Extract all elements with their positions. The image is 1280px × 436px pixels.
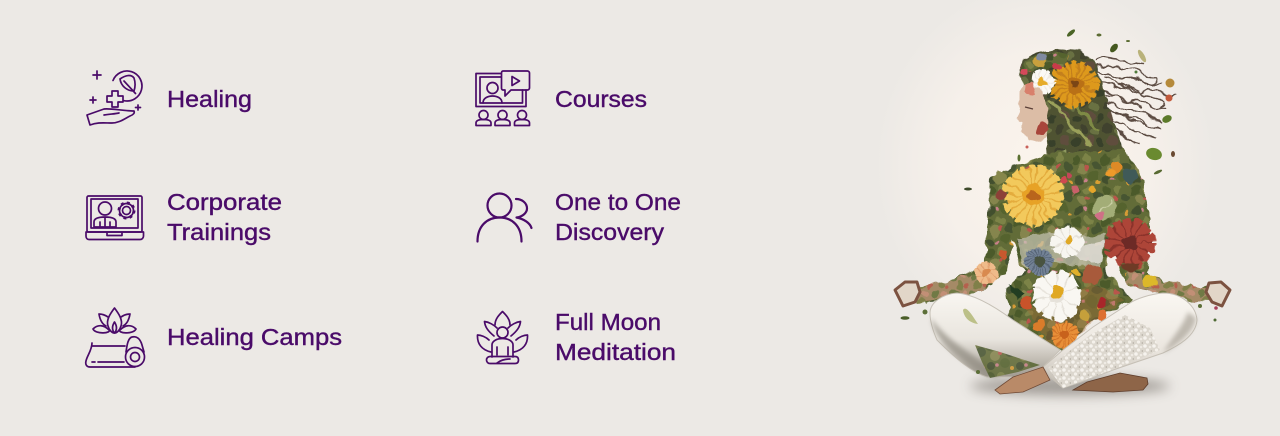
flower: upper daisy — [1053, 228, 1081, 256]
lace texture — [1048, 315, 1160, 388]
face — [1017, 84, 1048, 142]
flying leaves and petals — [900, 28, 1218, 374]
flower: red dahlia — [1108, 221, 1152, 273]
flower: white daisy centre — [1035, 274, 1079, 318]
flower: large sunflower — [1006, 167, 1062, 223]
label: Corporate Trainings: Trainings — [167, 219, 271, 245]
icon: meditating figure in lotus — [477, 312, 528, 364]
eye line — [1025, 107, 1033, 109]
icon: video course with audience — [476, 71, 530, 126]
label: Full Moon Meditation: Meditation — [555, 339, 676, 365]
label: Corporate Trainings: Corporate — [167, 189, 282, 215]
label: Full Moon Meditation: Full Moon — [555, 309, 661, 335]
label: Healing: Healing — [167, 86, 252, 112]
label: Healing Camps: Healing Camps — [167, 324, 342, 350]
torso and arms — [918, 150, 1215, 352]
foliage on left leg — [975, 345, 1040, 378]
soft glow behind figure — [875, 0, 1215, 350]
flower: hair daisy — [1032, 72, 1052, 92]
service: Corporate Trainings — [86, 189, 282, 245]
ground shadow — [970, 377, 1170, 395]
legs — [930, 293, 1197, 394]
flower: peach on arm — [976, 262, 998, 284]
right foot — [1073, 373, 1148, 392]
label: Full Moon Meditation — [555, 309, 676, 365]
label: One to One Discovery: Discovery — [555, 219, 665, 245]
service: Courses — [476, 71, 647, 126]
lower torso warm tones — [1020, 282, 1125, 350]
icon: two people outline — [478, 194, 532, 242]
icon: lotus and yoga mat — [86, 308, 144, 367]
service: Full Moon Meditation — [477, 309, 676, 365]
left foot — [995, 367, 1050, 394]
right knee shadow — [1163, 312, 1196, 353]
flower: blue thistle — [1025, 247, 1053, 275]
hair strands — [1095, 58, 1176, 144]
light chest patches — [1016, 232, 1105, 270]
label: Courses: Courses — [555, 86, 647, 112]
forearm left — [917, 268, 1000, 302]
left leg shadow — [931, 318, 1000, 378]
left leg — [930, 293, 1060, 377]
right leg — [1043, 293, 1197, 388]
service: One to One Discovery — [478, 189, 681, 245]
forearm right — [1125, 270, 1212, 302]
service: Healing — [87, 71, 252, 125]
small hair flowers — [1020, 53, 1061, 75]
flower: orange hair flower — [1054, 64, 1096, 106]
hands — [895, 282, 1230, 306]
foliage body, hair and flowers — [917, 49, 1215, 352]
icon: hand with leaf and cross — [87, 71, 142, 125]
head and neck foliage — [1019, 49, 1136, 172]
flower: orange lower — [1052, 322, 1078, 348]
label: One to One Discovery: One to One — [555, 189, 681, 215]
icon: laptop with trainer and gear — [86, 196, 144, 240]
label: Corporate Trainings — [167, 189, 282, 245]
illustration: meditating woman made of flowers — [895, 28, 1230, 395]
service: Healing Camps — [86, 308, 342, 367]
label: One to One Discovery — [555, 189, 681, 245]
smaller blooms — [993, 161, 1157, 331]
